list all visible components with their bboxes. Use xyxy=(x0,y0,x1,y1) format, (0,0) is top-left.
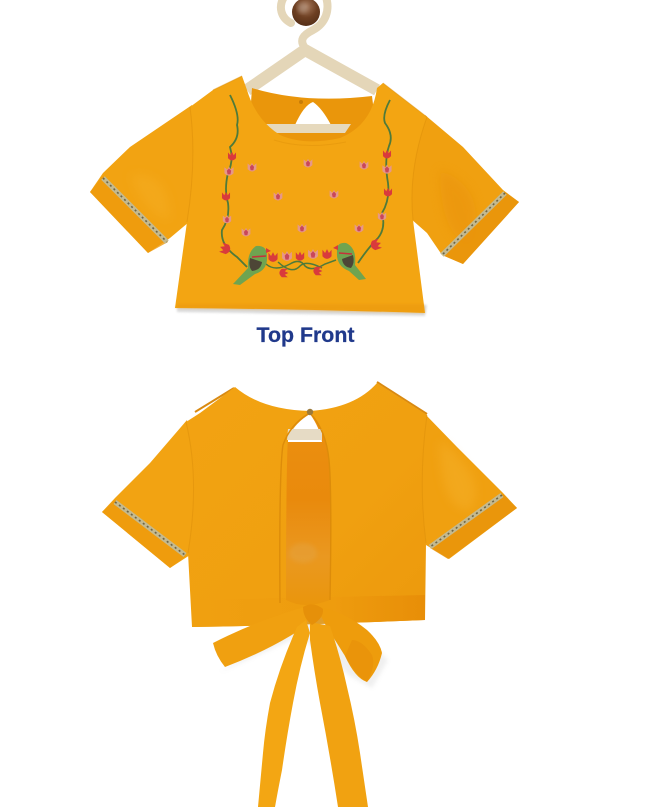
back hem band xyxy=(192,595,425,627)
left tail xyxy=(258,620,310,807)
back sleeve highlight xyxy=(440,440,476,510)
hem shade xyxy=(175,304,425,313)
hanger: front view xyxy=(247,0,377,90)
sleeve shading xyxy=(440,170,476,245)
right loop inner fold xyxy=(345,640,373,682)
keyhole opening xyxy=(295,102,331,125)
right bird xyxy=(333,243,366,280)
inner back neckline xyxy=(248,88,378,145)
right sleeve xyxy=(409,115,519,264)
vine tulips xyxy=(218,150,392,255)
back lace trim left xyxy=(115,502,185,555)
lace trim right xyxy=(442,193,505,255)
hanger strap left xyxy=(195,388,234,412)
hanger bar in neckline xyxy=(266,124,351,133)
seam lines xyxy=(187,76,427,222)
neckline gather seam xyxy=(274,140,346,146)
left sleeve xyxy=(90,105,195,253)
back left sleeve xyxy=(102,420,194,568)
button loop xyxy=(299,100,303,104)
left bird xyxy=(233,246,271,285)
back cuff shading xyxy=(102,500,186,568)
embroidered vine left xyxy=(222,95,247,267)
lace trim left xyxy=(103,178,167,242)
left bow loop xyxy=(213,605,312,667)
hanger bar through opening xyxy=(287,429,322,440)
hanger strap right xyxy=(377,382,427,414)
embroidered vine right xyxy=(358,100,391,263)
back sleeve seams xyxy=(186,415,427,553)
garment: top front xyxy=(90,76,519,316)
torso xyxy=(175,76,427,313)
back right sleeve xyxy=(421,414,517,559)
garment: top back xyxy=(102,382,517,627)
opening edge seams xyxy=(280,413,331,603)
scattered tulip motifs xyxy=(242,159,368,236)
floral garland xyxy=(266,249,336,277)
knot xyxy=(303,604,323,625)
back button xyxy=(307,409,313,415)
back opening xyxy=(286,413,331,605)
soft shadow xyxy=(177,300,427,316)
inner muted patch xyxy=(289,543,317,563)
right tail xyxy=(310,622,368,807)
caption: Top Front: Top Front xyxy=(256,323,354,347)
back torso xyxy=(186,383,427,627)
cuff shading xyxy=(90,176,168,253)
white keyhole xyxy=(288,414,322,442)
back lace trim right xyxy=(430,495,502,547)
right bow loop xyxy=(316,606,382,682)
bow tie xyxy=(213,604,388,807)
bow shadow xyxy=(220,612,388,688)
